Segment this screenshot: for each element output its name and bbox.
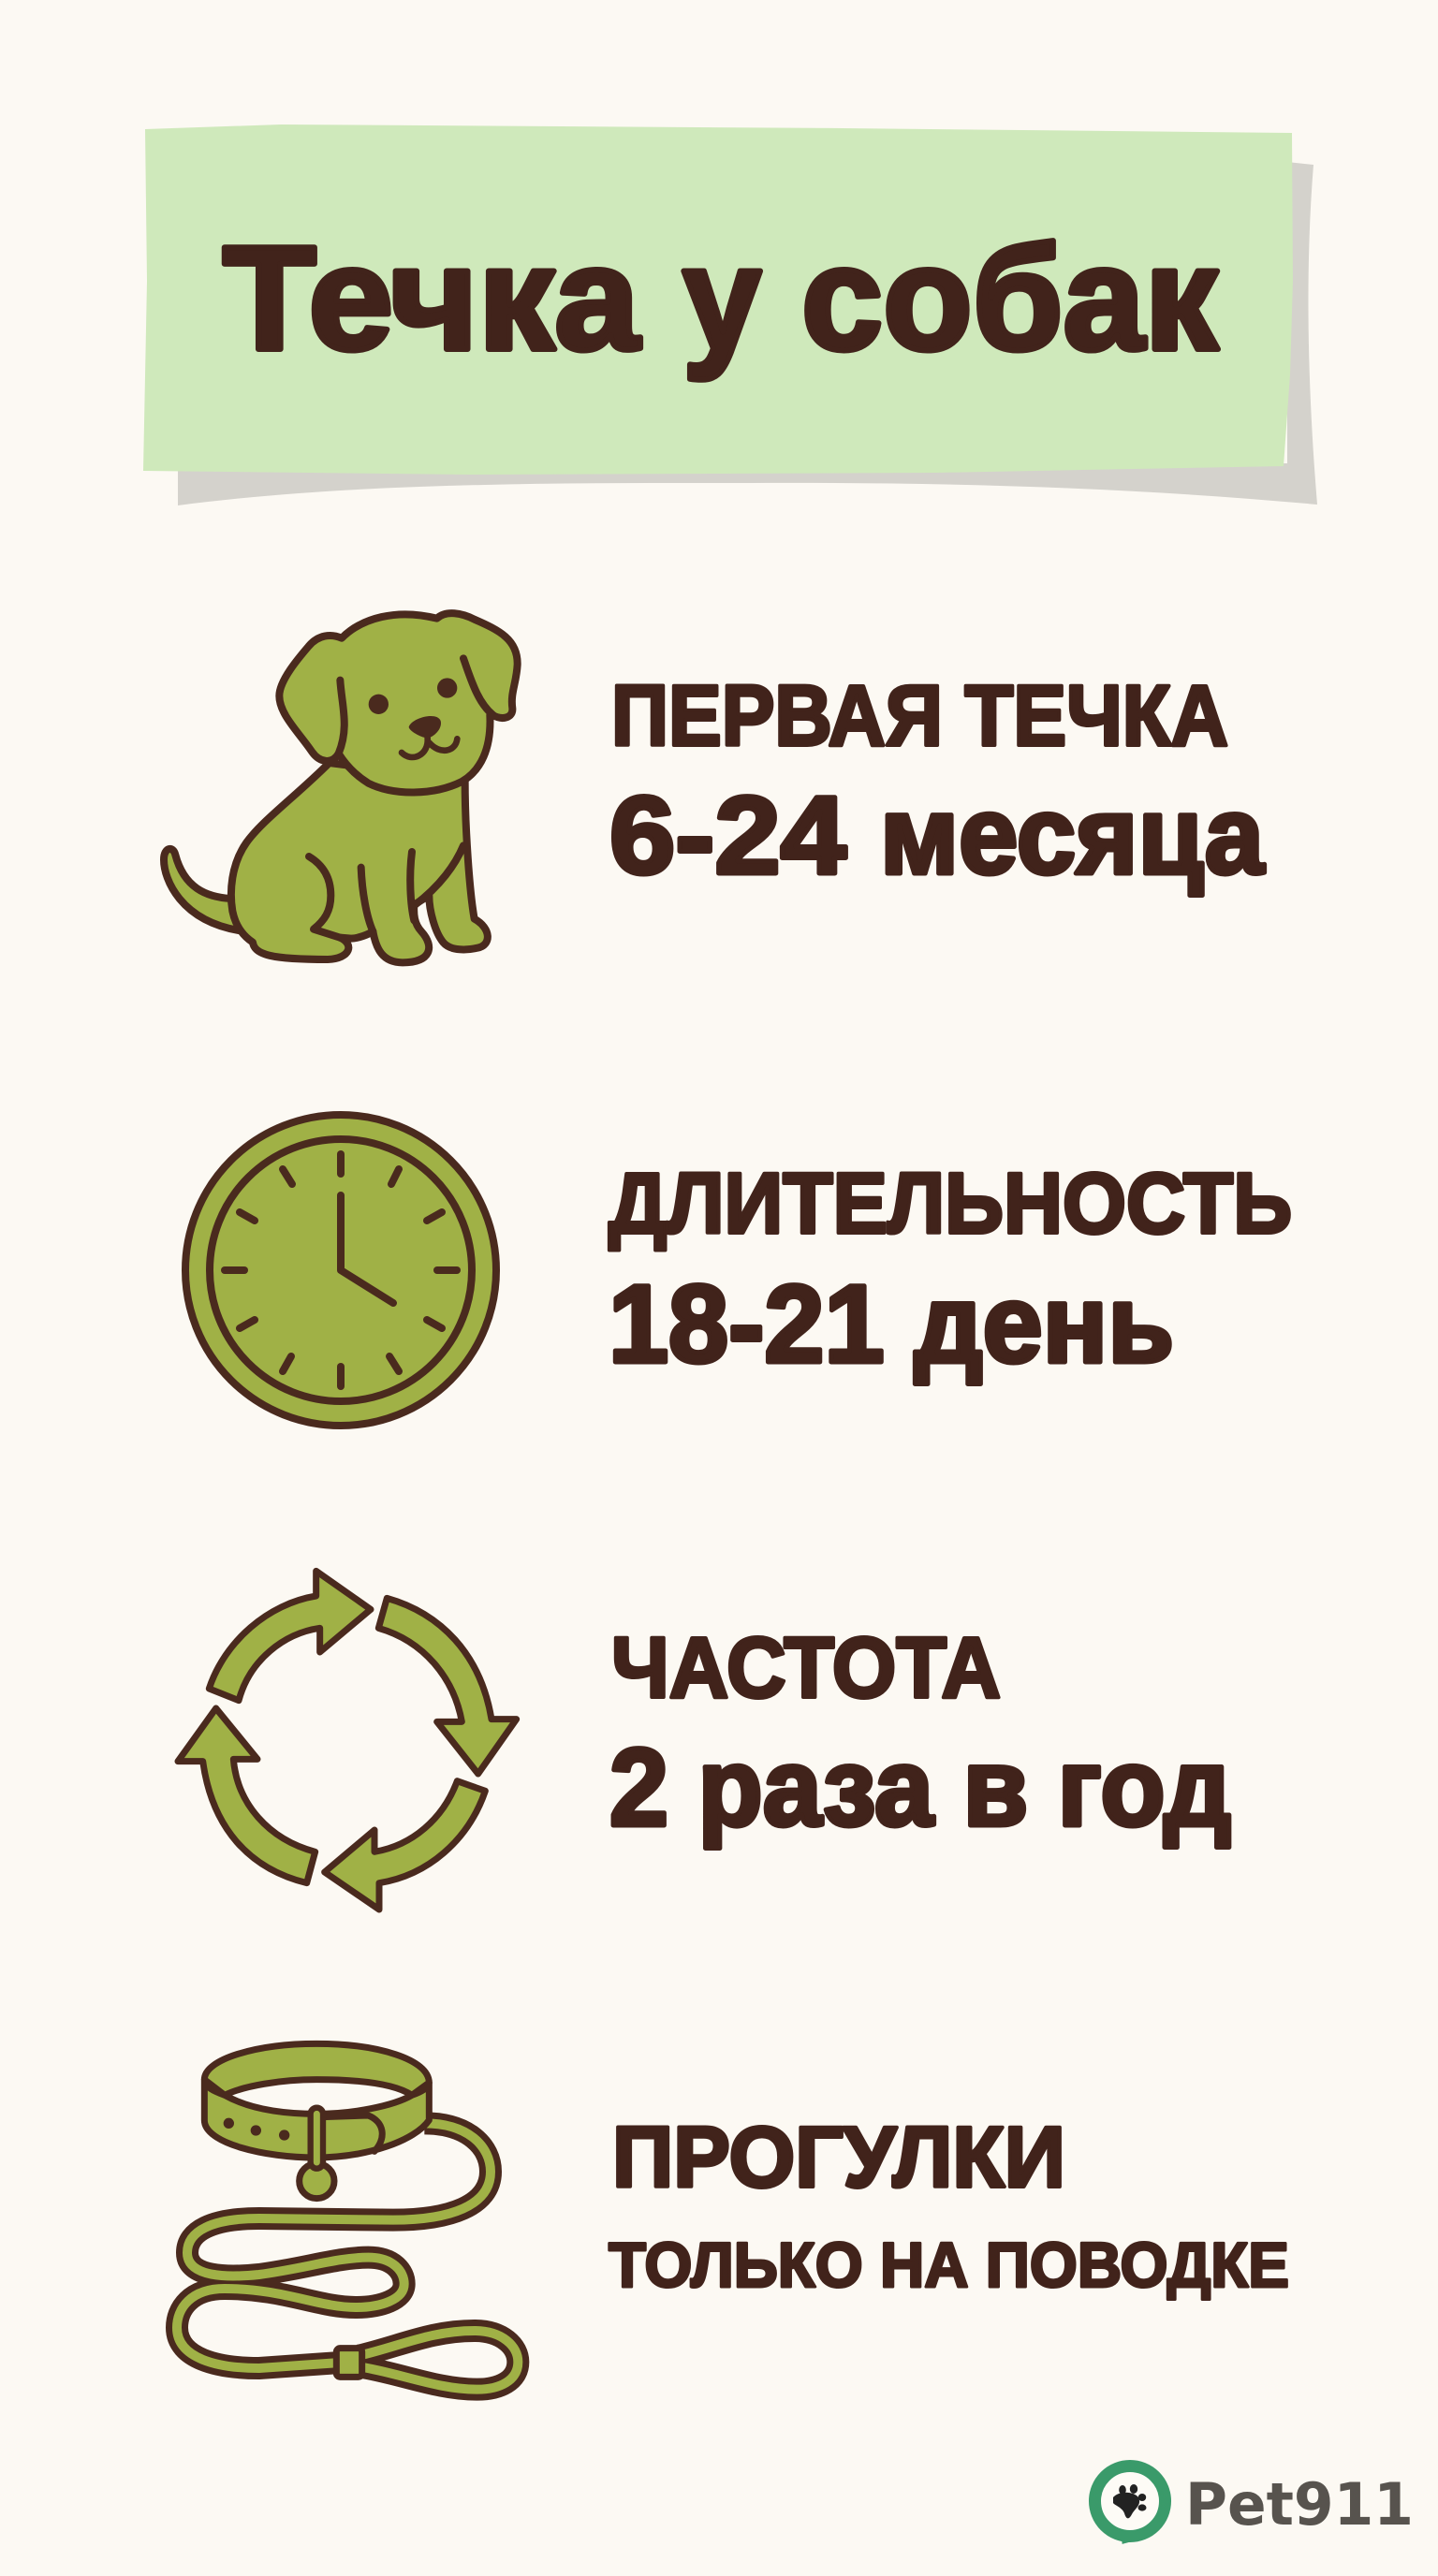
- row: frequency: [178, 1571, 1231, 1910]
- value: months: 6-24: [609, 774, 846, 898]
- row: walks: [177, 2043, 1289, 2390]
- icon: collar and leash: [177, 2043, 518, 2390]
- label: frequency: ЧАСТОТА: [611, 1620, 1001, 1716]
- title: [223, 216, 1219, 381]
- banner paper: [143, 124, 1293, 475]
- label: first heat: ПЕРВАЯ ТЕЧКА: [611, 668, 1228, 764]
- value: months: месяца: [880, 774, 1265, 898]
- title: Течка: [223, 216, 640, 381]
- icon: cycle arrows: [178, 1571, 517, 1910]
- label: walks: ПРОГУЛКИ: [612, 2110, 1065, 2205]
- row: first heat: [164, 613, 1265, 962]
- title: у: [682, 216, 761, 381]
- wordmark: Pet911: [1185, 2470, 1414, 2539]
- row: duration: [185, 1115, 1292, 1426]
- value: months: [609, 774, 1265, 898]
- value: times a year: 2 раза в год: [609, 1726, 1231, 1850]
- icon: puppy: [164, 613, 518, 962]
- icon: paw speech bubble: [1095, 2466, 1165, 2542]
- icon: clock: [185, 1115, 496, 1426]
- title: собак: [801, 216, 1219, 381]
- logo: Pet911: [1095, 2466, 1414, 2542]
- label: duration: ДЛИТЕЛЬНОСТЬ: [609, 1156, 1292, 1251]
- title banner: [143, 124, 1317, 505]
- value: days: 18-21 день: [609, 1263, 1174, 1386]
- banner shadow: [178, 162, 1317, 505]
- value: on a leash only: ТОЛЬКО НА ПОВОДКЕ: [609, 2230, 1289, 2301]
